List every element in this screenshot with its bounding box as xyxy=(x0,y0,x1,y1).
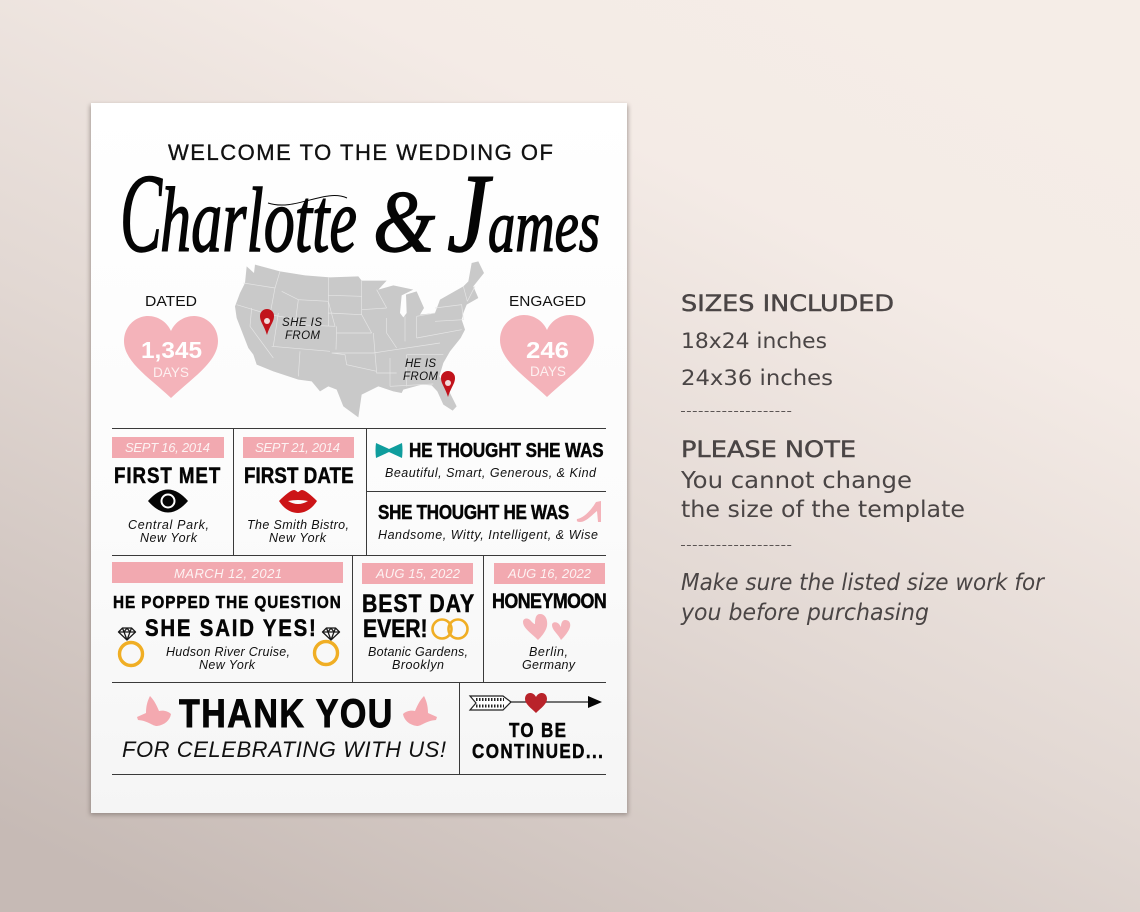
engaged heart: ENGAGED xyxy=(509,293,586,310)
map labels: FROM xyxy=(403,371,438,383)
panel: first met: SEPT 16, 2014 xyxy=(125,440,210,455)
dated heart xyxy=(124,293,218,398)
panel: best day xyxy=(362,563,475,672)
panel: proposal: HE POPPED THE QUESTION xyxy=(113,592,341,612)
icon: bow tie xyxy=(376,443,402,458)
panel: thank you: THANK YOU xyxy=(179,690,392,736)
text block: please note xyxy=(680,438,965,523)
panel: first date: SEPT 21, 2014 xyxy=(255,440,340,455)
panel: first date: FIRST DATE xyxy=(244,465,354,488)
US map xyxy=(235,261,484,417)
panel: he thought she was xyxy=(376,439,604,480)
text block: please note: the size of the template xyxy=(681,497,965,523)
text block: size reminder: Make sure the listed size work for xyxy=(681,570,1045,596)
title: couple names: J xyxy=(447,152,493,276)
map labels: SHE IS xyxy=(282,317,322,329)
panel: honeymoon: Berlin, xyxy=(529,645,568,659)
text block: sizes included: 18x24 inches xyxy=(681,329,827,353)
text block: please note: You cannot change xyxy=(680,468,912,494)
panel: best day: BEST DAY xyxy=(362,589,475,617)
dated heart: DAYS xyxy=(153,364,189,380)
pin: she xyxy=(260,309,274,335)
panel: thank you xyxy=(122,690,446,762)
panel: proposal: Hudson River Cruise, xyxy=(166,645,290,659)
text block: sizes included xyxy=(681,292,894,390)
panel: he thought she was: Beautiful, Smart, Generous, & Kind xyxy=(385,466,597,480)
panel: best day: Botanic Gardens, xyxy=(368,645,468,659)
panel: first date: The Smith Bistro, xyxy=(247,518,349,532)
icon: right ring xyxy=(314,628,340,664)
panel: first met xyxy=(112,437,224,545)
icon: hearts xyxy=(523,614,570,640)
icon: eye xyxy=(148,490,188,512)
panel: first met: Central Park, xyxy=(128,518,209,532)
pin: he xyxy=(441,371,455,397)
panel: honeymoon xyxy=(492,563,607,672)
panel: honeymoon: HONEYMOON xyxy=(492,590,607,613)
panel: she thought he was xyxy=(378,501,601,542)
title: welcome line: WELCOME TO THE WEDDING OF xyxy=(168,140,553,165)
panel: first met: New York xyxy=(140,531,198,545)
panel: she thought he was: SHE THOUGHT HE WAS xyxy=(378,501,569,523)
map labels xyxy=(282,317,438,383)
icon: wedding rings xyxy=(432,620,468,638)
panel: proposal: SHE SAID YES! xyxy=(145,614,316,641)
text block: size reminder xyxy=(680,570,1045,626)
title: couple names: harlotte xyxy=(160,169,357,271)
icon: lips xyxy=(279,490,317,513)
engaged heart: DAYS xyxy=(530,363,566,379)
panel: honeymoon: Germany xyxy=(522,658,576,672)
icon: left ring xyxy=(118,628,142,666)
engaged heart xyxy=(500,293,594,397)
panel: proposal: MARCH 12, 2021 xyxy=(174,566,282,581)
icon: high heel xyxy=(577,501,601,522)
panel: to be continued xyxy=(470,693,603,762)
dated heart: 1,345 xyxy=(141,337,202,363)
map labels: FROM xyxy=(285,330,320,342)
title: couple names: ames xyxy=(488,186,600,268)
poster paper xyxy=(90,103,628,815)
text block: size reminder: you before purchasing xyxy=(680,600,929,626)
panel: honeymoon: AUG 16, 2022 xyxy=(507,566,592,581)
timeline grid xyxy=(112,428,606,774)
panel: to be continued: TO BE xyxy=(509,719,566,741)
panel: best day: AUG 15, 2022 xyxy=(375,566,461,581)
icon: left dove xyxy=(137,696,171,726)
panel: best day: Brooklyn xyxy=(392,658,444,672)
icon: right dove xyxy=(403,696,437,726)
panel: best day: EVER! xyxy=(363,614,428,642)
panel: first met: FIRST MET xyxy=(114,465,221,488)
panel: first date: New York xyxy=(269,531,327,545)
panel: to be continued: CONTINUED... xyxy=(472,740,603,762)
panel: she thought he was: Handsome, Witty, Intelligent, & Wise xyxy=(378,528,598,542)
engaged heart: 246 xyxy=(526,337,569,363)
panel: first date xyxy=(243,437,354,545)
icon: arrow with heart xyxy=(470,693,602,713)
title: couple names: C xyxy=(120,152,163,276)
text block: please note: PLEASE NOTE xyxy=(681,438,856,463)
panel: proposal: New York xyxy=(199,658,256,672)
panel: thank you: FOR CELEBRATING WITH US! xyxy=(122,737,446,762)
text block: sizes included: SIZES INCLUDED xyxy=(681,292,894,317)
panel: he thought she was: HE THOUGHT SHE WAS xyxy=(409,439,604,461)
dated heart: DATED xyxy=(145,293,197,310)
title: couple names: & xyxy=(373,174,435,271)
text block: sizes included: 24x36 inches xyxy=(681,366,833,390)
map labels: HE IS xyxy=(405,358,436,370)
title: couple names xyxy=(120,152,600,276)
panel: proposal xyxy=(112,562,343,672)
